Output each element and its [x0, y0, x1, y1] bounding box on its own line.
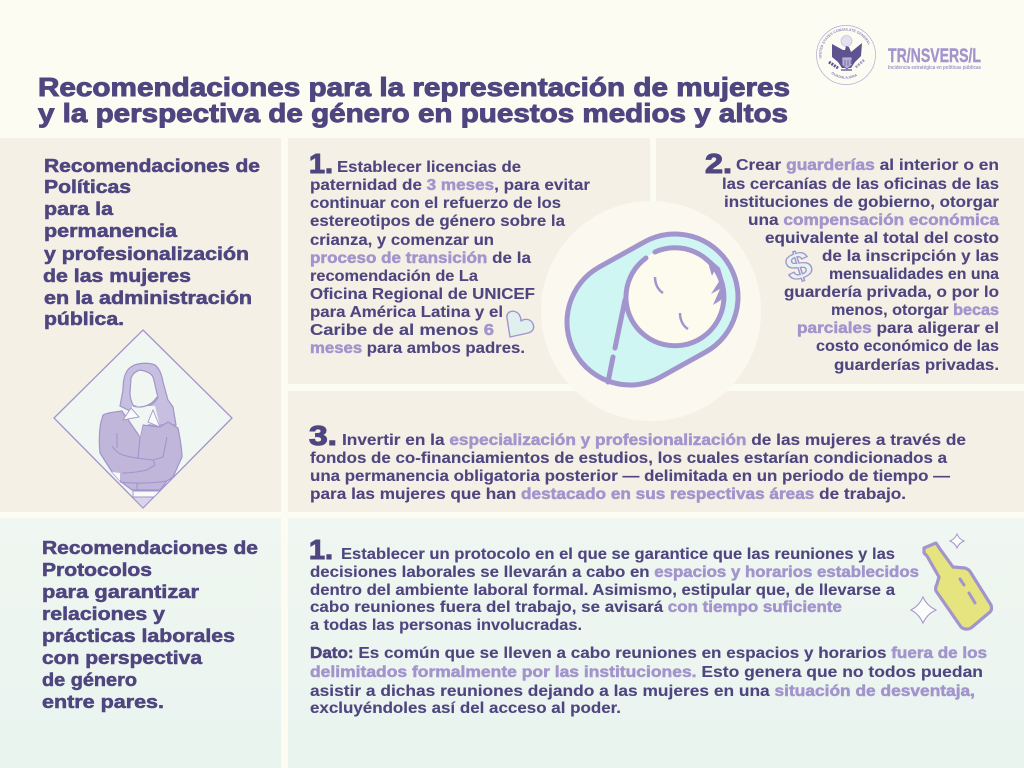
panel: políticas heading: Políticas: [44, 176, 131, 197]
panel: recomendación 1: proceso de transición de la: [310, 250, 531, 267]
panel: recomendación 2: costo económico de las: [816, 338, 999, 355]
panel: recomendación 3: fondos de co-financiamientos de estudios, los cuales estarían condicionados a: [310, 450, 947, 467]
panel: protocolos recomendación: Establecer un protocolo en el que se garantice que las reuniones y las: [341, 546, 895, 563]
illustration: swaddled baby in circle: [541, 201, 761, 421]
panel: protocolos recomendación: cabo reuniones fuera del trabajo, se avisará con tiempo suficiente: [310, 599, 842, 616]
panel: recomendación 2: instituciones de gobierno, otorgar: [724, 194, 999, 211]
panel: recomendación 3: para las mujeres que han destacado en sus respectivas áreas de trabajo.: [310, 486, 906, 503]
panel: recomendación 3: una permanencia obligatoria posterior — delimitada en un periodo de tiempo —: [310, 468, 951, 485]
panel: políticas heading: y profesionalización: [44, 243, 249, 264]
text block: dato: Dato: Es común que se lleven a cabo reuniones en espacios y horarios fuera de los: [310, 645, 987, 662]
logo: Transversal: Incidencia estratégica en políticas públicas: [888, 65, 981, 71]
panel: recomendación 3: [288, 391, 1024, 512]
panel: recomendación 2: equivalente al total del costo: [765, 230, 999, 247]
panel: políticas heading: de las mujeres: [43, 265, 191, 286]
panel: recomendación 1: para América Latina y el: [310, 304, 503, 321]
text block: dato: excluyéndoles así del acceso al poder.: [310, 700, 621, 717]
panel: recomendación 1: Oficina Regional de UNICEF: [310, 286, 535, 303]
panel: políticas heading: en la administración: [44, 287, 252, 308]
panel: recomendación 3: 3.: [309, 420, 337, 451]
panel: recomendación 2: Crear guarderías al interior o en: [736, 157, 999, 174]
panel: protocolos recomendación: dentro del ambiente laboral formal. Asimismo, estipular que, de llevarse a: [310, 582, 895, 599]
panel: recomendación 2: [656, 138, 1024, 384]
panel: recomendación 2: guarderías privadas.: [834, 357, 999, 374]
panel: recomendación 2: una compensación económica: [748, 212, 999, 229]
text block: dato: delimitados formalmente por las instituciones. Esto genera que no todos puedan: [310, 664, 983, 681]
panel: recomendación 2: 2.: [705, 148, 732, 179]
panel: protocolos heading: entre pares.: [42, 691, 164, 712]
text block: dato: asistir a dichas reuniones dejando a las mujeres en una situación de desventaja,: [310, 683, 975, 700]
panel: recomendación 2: guardería privada, o por lo: [784, 284, 999, 301]
icon: heart: [507, 311, 534, 337]
panel: protocolos heading: con perspectiva: [42, 647, 203, 668]
panel: protocolos recomendación: 1.: [309, 534, 333, 565]
panel: protocolos recomendación: [288, 518, 1024, 768]
panel: políticas heading: para la: [44, 198, 114, 219]
title: Recomendaciones para la representación de mujeres: [38, 72, 790, 102]
title: y la perspectiva de género en puestos medios y altos: [38, 98, 788, 128]
logo: Transversal: [888, 45, 981, 71]
icon: bottle with sparkles: [911, 534, 992, 629]
panel: recomendación 1: estereotipos de género sobre la: [310, 213, 565, 230]
panel: recomendación 1: recomendación de La: [310, 268, 478, 285]
panel: recomendación 2: las cercanías de las oficinas de las: [722, 176, 999, 193]
text block: dato: [310, 645, 987, 717]
panel: protocolos recomendación: a todas las personas involucradas.: [310, 617, 582, 634]
logo: consulate seal: [816, 25, 876, 85]
panel: protocolos recomendación: decisiones laborales se llevarán a cabo en espacios y horarios establecidos: [310, 564, 919, 581]
panel: protocolos heading: de género: [42, 669, 137, 690]
panel: políticas heading: Recomendaciones de: [44, 155, 260, 176]
panel: políticas heading: permanencia: [44, 220, 178, 241]
panel: recomendación 3: Invertir en la especialización y profesionalización de las mujeres a través de: [342, 432, 966, 449]
illustration: woman with crossed arms in diamond: [54, 330, 232, 508]
panel: recomendación 1: [288, 138, 650, 384]
panel: políticas heading: [0, 138, 281, 512]
panel: recomendación 1: Caribe de al menos 6: [310, 322, 494, 339]
panel: protocolos heading: Protocolos: [42, 559, 152, 580]
panel: recomendación 2: menos, otorgar becas: [831, 302, 999, 319]
panel: protocolos heading: para garantizar: [42, 581, 199, 602]
title: [38, 72, 790, 128]
logo: Transversal: TR/NSVERS/L: [888, 45, 981, 67]
logo: consulate seal: GUADALAJARA: [832, 72, 858, 79]
panel: recomendación 1: 1.: [309, 148, 333, 179]
panel: protocolos heading: prácticas laborales: [42, 625, 235, 646]
logo: consulate seal: UNITED STATES CONSULATE GENERAL: [819, 28, 870, 58]
panel: recomendación 2: de la inscripción y las: [822, 248, 999, 265]
panel: protocolos heading: Recomendaciones de: [42, 537, 258, 558]
panel: recomendación 2: mensualidades en una: [829, 266, 999, 283]
icon: dollar sign: $: [780, 243, 817, 291]
panel: recomendación 2: parciales para aligerar el: [797, 320, 999, 337]
panel: protocolos heading: relaciones y: [42, 603, 166, 624]
panel: recomendación 1: continuar con el refuerzo de los: [310, 195, 561, 212]
panel: recomendación 1: Establecer licencias de: [337, 159, 521, 176]
panel: protocolos heading: [0, 518, 281, 768]
panel: políticas heading: pública.: [44, 308, 124, 329]
panel: recomendación 1: meses para ambos padres.: [310, 340, 525, 357]
panel: recomendación 1: paternidad de 3 meses , para evitar: [310, 177, 590, 194]
panel: recomendación 1: crianza, y comenzar un: [310, 232, 494, 249]
